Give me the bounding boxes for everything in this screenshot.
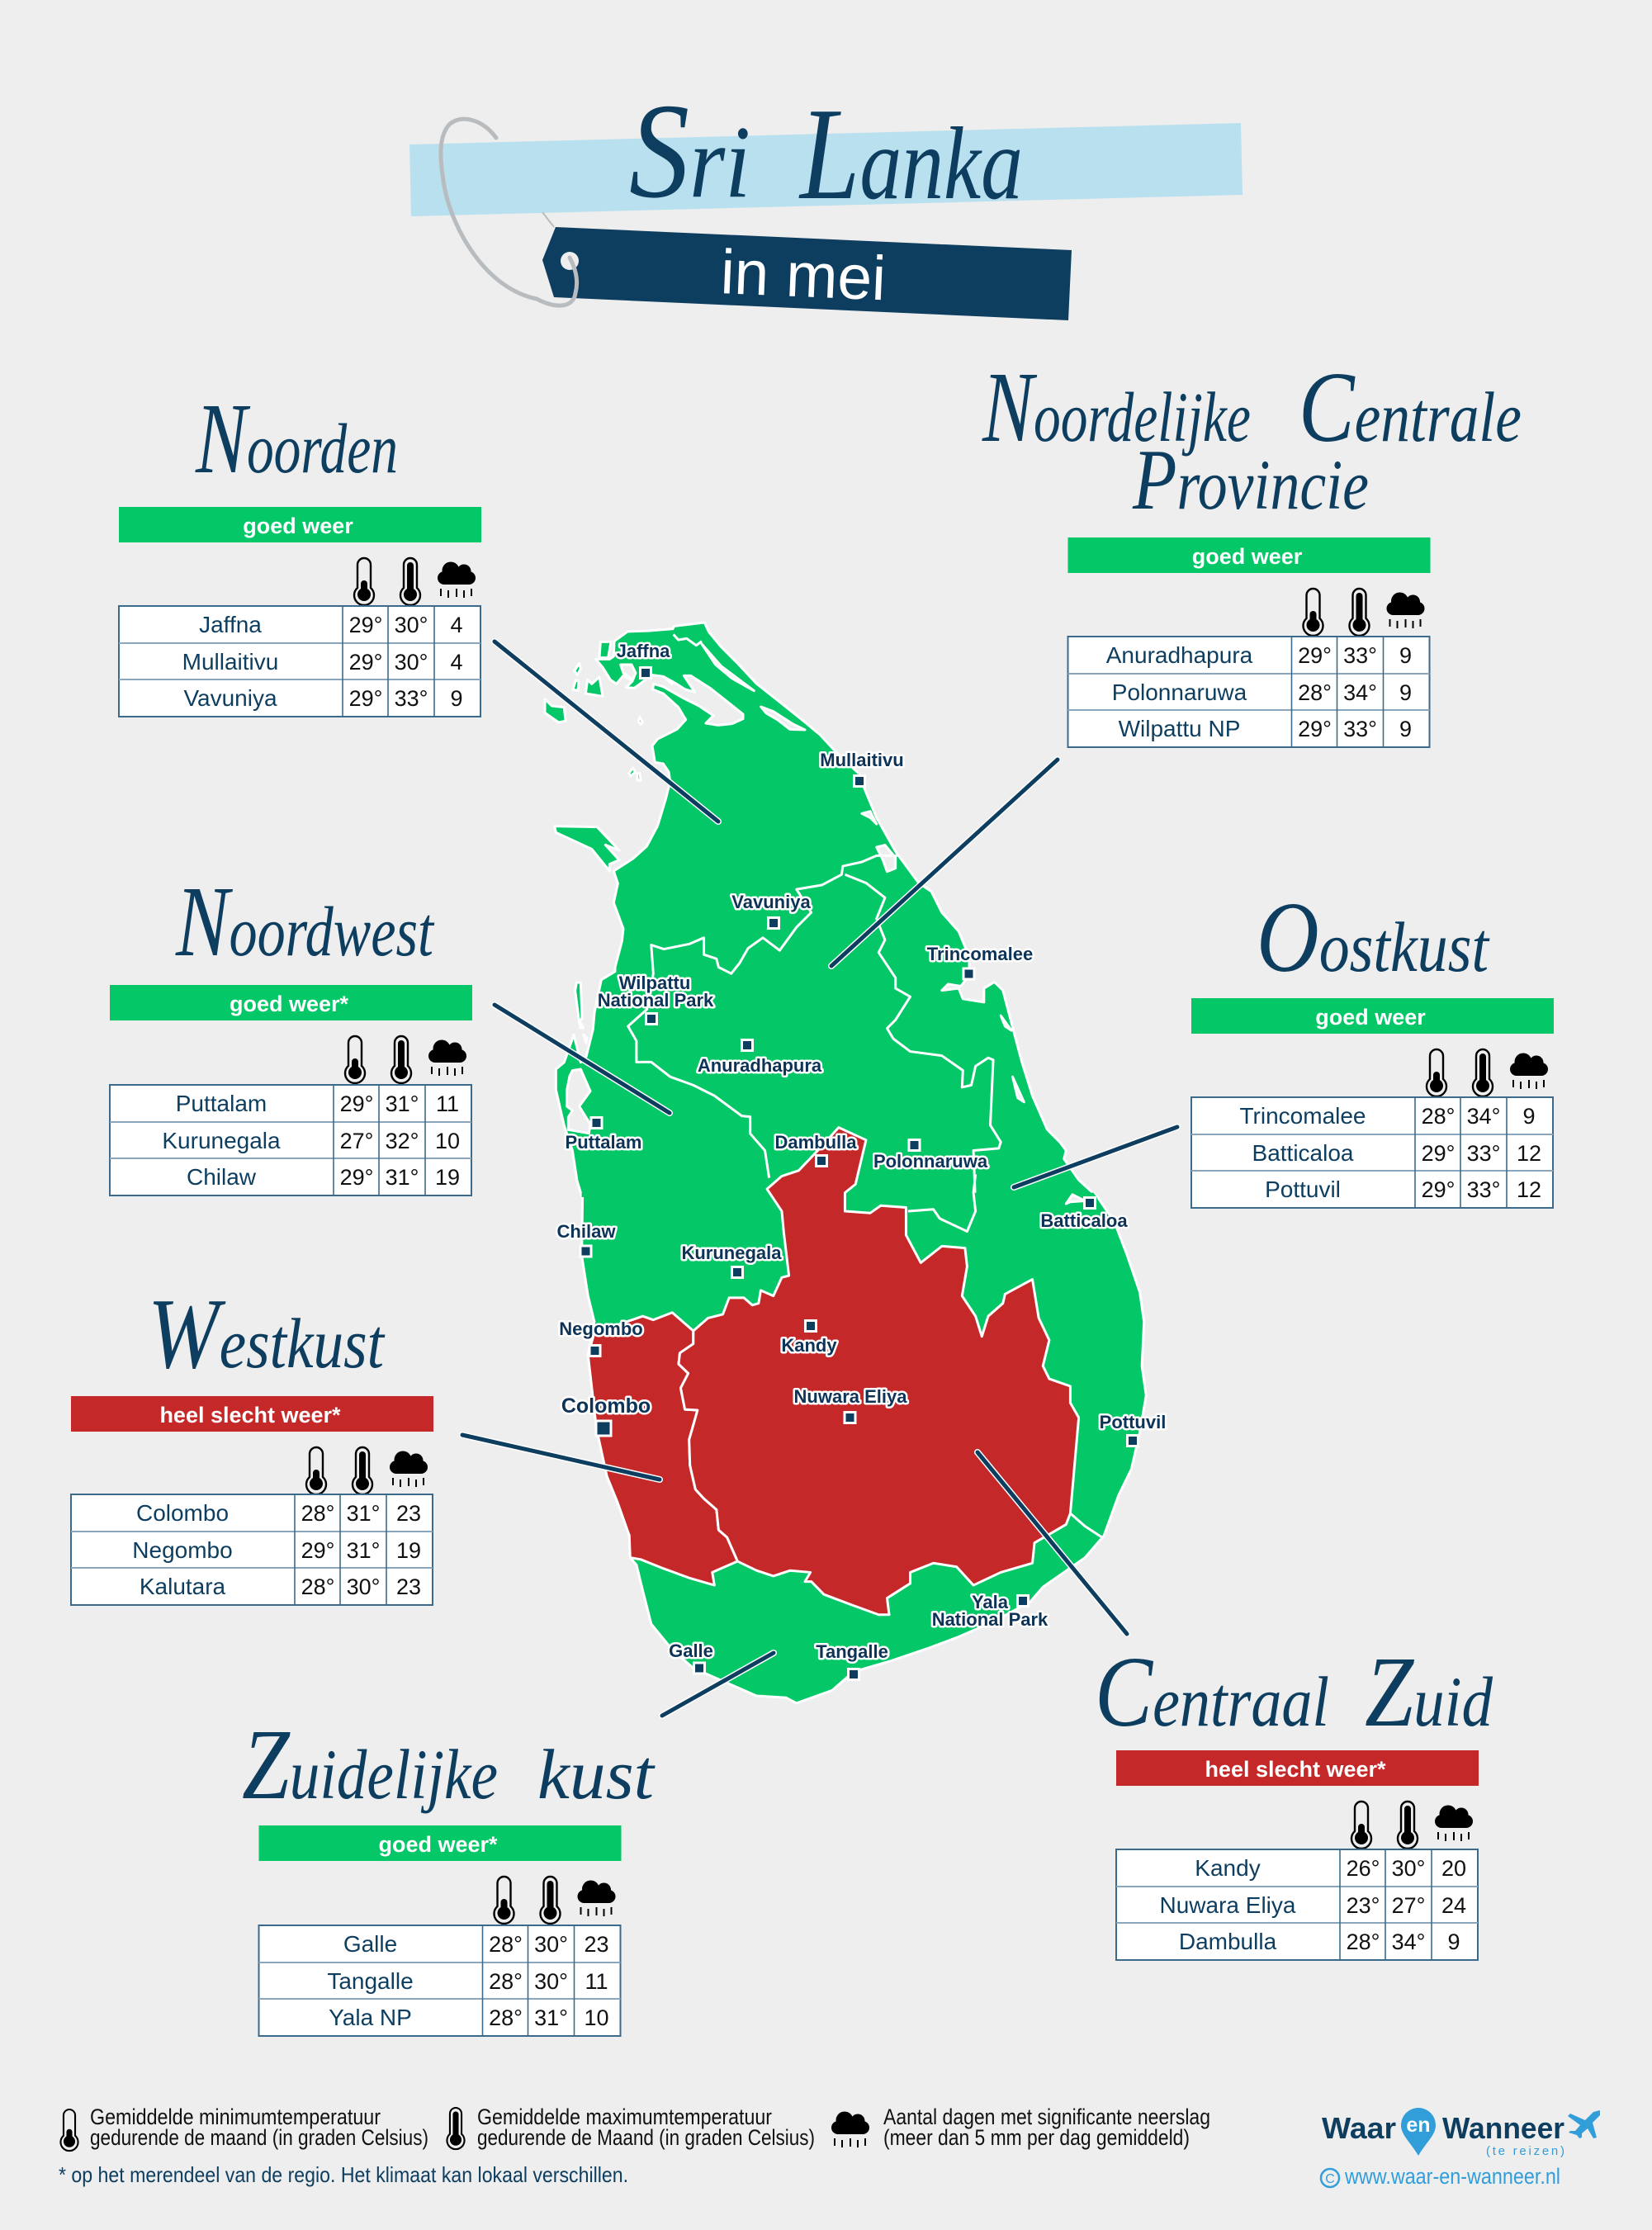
weather bar and table [71, 1396, 433, 1605]
weather bar and table: 11 [585, 1969, 608, 1994]
legend text: maximum: gedurende de Maand (in graden Celsius) [477, 2125, 815, 2150]
city labels: Nuwara Eliya [794, 1386, 907, 1407]
city labels: Wilpattu [619, 973, 690, 993]
heading [1095, 1636, 1493, 1748]
title text [629, 75, 1023, 227]
heading: Zuidelijke [242, 1709, 498, 1820]
weather bar and table: 29° [1422, 1177, 1455, 1202]
city labels: Negombo [559, 1319, 643, 1339]
weather bar and table: 9 [450, 686, 463, 711]
weather bar and table: 4 [450, 613, 463, 637]
panel: Noordwest [110, 866, 472, 1195]
weather bar and table: 28° [489, 2005, 523, 2030]
weather bar and table: Yala NP [329, 2005, 412, 2030]
title banner: Sri Lanka [409, 75, 1243, 227]
city labels: Batticaloa [1040, 1210, 1128, 1231]
city labels: Kandy [781, 1335, 837, 1356]
city labels: National Park [932, 1609, 1048, 1630]
weather bar and table: 33° [395, 686, 428, 711]
weather bar and table: 30° [347, 1574, 380, 1599]
heading: Noordwest [175, 866, 435, 978]
weather bar and table: Trincomalee [1239, 1103, 1366, 1129]
weather bar and table: 9 [1399, 643, 1412, 668]
weather bar and table [1068, 537, 1430, 747]
weather bar and table: goed weer [1315, 1005, 1426, 1030]
weather bar and table: 29° [340, 1165, 373, 1190]
weather bar and table: Kalutara [140, 1574, 226, 1599]
weather bar and table: Tangalle [327, 1968, 414, 1994]
weather bar and table: 28° [1422, 1104, 1455, 1129]
weather bar and table: 27° [1392, 1893, 1425, 1918]
west coast outline, lagoon and islands [555, 826, 658, 1197]
icon: plane [1568, 2110, 1600, 2138]
map west coast [556, 826, 716, 1197]
copyright and website: www.waar-en-wanneer.nl [1344, 2164, 1560, 2189]
city labels: Mullaitivu [820, 750, 904, 770]
weather bar and table: Kurunegala [162, 1128, 281, 1153]
heading: Provincie [1132, 431, 1369, 528]
region: Westkust [588, 1313, 737, 1585]
weather bar and table: 32° [386, 1129, 419, 1153]
logo: Waar en Wanneer: (te reizen) [1486, 2144, 1564, 2158]
weather bar and table: 28° [301, 1574, 334, 1599]
legend text: rain [883, 2105, 1210, 2150]
weather bar and table: 29° [349, 650, 382, 675]
logo: Waar en Wanneer [1321, 2108, 1600, 2189]
weather bar and table: heel slecht weer* [159, 1403, 341, 1427]
weather bar and table: 28° [301, 1501, 334, 1526]
panel: Centraal Zuid [1095, 1636, 1493, 1960]
panel: Westkust [71, 1278, 433, 1605]
subtitle: in mei [719, 237, 888, 314]
weather bar and table: 11 [436, 1091, 459, 1116]
weather bar and table: 28° [489, 1969, 523, 1994]
weather bar and table: 29° [301, 1538, 334, 1563]
heading: Zuid [1365, 1636, 1493, 1748]
weather bar and table: 33° [1467, 1141, 1500, 1166]
legend text: rain: Aantal dagen met significante neerslag [883, 2105, 1210, 2129]
weather bar and table: 30° [534, 1969, 568, 1994]
city markers [580, 667, 1138, 1679]
heading: Noordelijke [982, 352, 1251, 463]
legend text: rain: (meer dan 5 mm per dag gemiddeld) [883, 2125, 1190, 2150]
icon: minimum temperature [60, 2109, 78, 2151]
weather bar and table: 31° [347, 1501, 380, 1526]
weather bar and table: 27° [340, 1129, 373, 1153]
weather bar and table: 9 [1399, 717, 1412, 741]
weather bar and table: 10 [584, 2005, 609, 2030]
weather bar and table: 34° [1467, 1104, 1500, 1129]
weather bar and table: Wilpattu NP [1119, 716, 1240, 741]
city labels: Pottuvil [1100, 1412, 1166, 1432]
city labels: Jaffna [617, 641, 670, 661]
weather bar and table [1116, 1750, 1479, 1960]
legend text: minimum: Gemiddelde minimumtemperatuur [90, 2105, 381, 2129]
city labels: Colombo [561, 1394, 651, 1418]
weather bar and table: 20 [1441, 1856, 1466, 1881]
weather bar and table: Kandy [1195, 1855, 1261, 1881]
weather bar and table: Batticaloa [1252, 1140, 1354, 1166]
weather bar and table [110, 985, 472, 1195]
weather bar and table: Mullaitivu [182, 649, 278, 675]
weather bar and table: goed weer* [378, 1832, 498, 1857]
weather bar and table: 30° [534, 1932, 568, 1957]
heading: Westkust [148, 1278, 386, 1390]
weather bar and table: Pottuvil [1265, 1177, 1341, 1202]
weather bar and table: goed weer [1192, 544, 1303, 569]
weather bar and table: 29° [349, 686, 382, 711]
weather bar and table: 29° [1298, 643, 1332, 668]
legend [60, 2105, 1210, 2151]
weather bar and table [119, 507, 481, 717]
weather bar and table: 34° [1343, 680, 1377, 705]
city labels: Polonnaruwa [873, 1151, 988, 1172]
map north part [628, 774, 1102, 1205]
weather bar and table: Dambulla [1179, 1929, 1277, 1954]
weather bar and table: 33° [1343, 717, 1377, 741]
weather bar and table: goed weer* [230, 992, 349, 1016]
weather bar and table: Jaffna [199, 612, 262, 637]
weather bar and table: 34° [1392, 1929, 1425, 1954]
north tip coast and islands [545, 623, 859, 826]
weather bar and table: 28° [1347, 1929, 1380, 1954]
weather bar and table: 4 [450, 650, 463, 675]
icon: maximum temperature [447, 2108, 465, 2149]
legend text: minimum [90, 2105, 428, 2150]
weather bar and table: 31° [534, 2005, 568, 2030]
copyright and website: C [1325, 2172, 1335, 2186]
weather bar and table: 33° [1343, 643, 1377, 668]
weather bar and table: Chilaw [187, 1164, 257, 1190]
city labels [557, 641, 1166, 1662]
weather bar and table: Colombo [136, 1500, 229, 1526]
weather bar and table: Vavuniya [183, 685, 277, 711]
city labels: Tangalle [816, 1641, 888, 1662]
weather bar and table: 9 [1447, 1929, 1460, 1954]
logo: Waar en Wanneer: en [1406, 2114, 1431, 2137]
logo: Waar en Wanneer: Wanneer [1442, 2111, 1564, 2145]
weather bar and table: 19 [396, 1538, 421, 1563]
map south part [582, 1128, 1146, 1703]
weather bar and table: 23 [584, 1932, 609, 1957]
weather bar and table: 30° [1392, 1856, 1425, 1881]
weather bar and table: 33° [1467, 1177, 1500, 1202]
weather bar and table: Nuwara Eliya [1160, 1892, 1296, 1918]
legend text: minimum: gedurende de maand (in graden Celsius) [90, 2125, 428, 2150]
city labels: Trincomalee [927, 944, 1033, 964]
weather bar and table: 23 [396, 1574, 421, 1599]
weather bar and table: 31° [386, 1165, 419, 1190]
weather bar and table: 28° [1298, 680, 1332, 705]
weather bar and table: 26° [1347, 1856, 1380, 1881]
weather bar and table: 31° [347, 1538, 380, 1563]
weather bar and table: 31° [386, 1091, 419, 1116]
weather bar and table: 10 [435, 1129, 460, 1153]
weather bar and table: 29° [1422, 1141, 1455, 1166]
heading: Oostkust [1257, 882, 1490, 993]
weather bar and table: 19 [435, 1165, 460, 1190]
heading: Centrale [1299, 352, 1522, 463]
weather bar and table: 30° [395, 613, 428, 637]
weather bar and table: Galle [343, 1931, 397, 1957]
region: Centraal Zuid [679, 1128, 1079, 1615]
panel: Oostkust [1191, 882, 1554, 1208]
weather bar and table [259, 1825, 621, 2036]
legend text: maximum: Gemiddelde maximumtemperatuur [477, 2105, 772, 2129]
city labels: Dambulla [774, 1132, 857, 1153]
weather bar and table: Negombo [132, 1537, 233, 1563]
weather bar and table: 9 [1522, 1104, 1536, 1129]
weather bar and table: 29° [349, 613, 382, 637]
city labels: Anuradhapura [698, 1055, 822, 1076]
title text: Sri [629, 75, 750, 226]
weather bar and table: 23 [396, 1501, 421, 1526]
weather bar and table: Anuradhapura [1106, 642, 1253, 668]
heading [982, 352, 1522, 528]
logo: Waar en Wanneer: Waar [1322, 2111, 1396, 2145]
weather bar and table: 9 [1399, 680, 1412, 705]
weather bar and table: 28° [489, 1932, 523, 1957]
weather bar and table: 24 [1441, 1893, 1466, 1918]
weather bar and table [1191, 998, 1554, 1208]
panel: Noordelijke Centrale Provincie [982, 352, 1522, 747]
pointer lines [462, 642, 1177, 1716]
weather bar and table: 23° [1347, 1893, 1380, 1918]
panel: Noorden [119, 383, 481, 717]
weather bar and table: Polonnaruwa [1112, 679, 1247, 705]
weather bar and table: goed weer [243, 514, 353, 538]
weather bar and table: Puttalam [176, 1091, 267, 1116]
city labels: Vavuniya [731, 892, 811, 912]
luggage tag: in mei [441, 119, 1072, 320]
weather bar and table: heel slecht weer* [1205, 1757, 1386, 1782]
map north tip [596, 623, 859, 859]
city labels: Kurunegala [681, 1243, 782, 1263]
legend text: maximum [477, 2105, 815, 2150]
city labels: Galle [669, 1641, 713, 1661]
weather bar and table: 12 [1517, 1177, 1541, 1202]
map of Sri Lanka [462, 623, 1177, 1716]
city labels: Chilaw [557, 1221, 616, 1242]
heading: kust [537, 1735, 656, 1814]
city labels: Yala [972, 1592, 1009, 1612]
city labels: National Park [598, 990, 714, 1011]
heading: Noorden [195, 383, 398, 495]
weather bar and table: 29° [340, 1091, 373, 1116]
heading: Centraal [1095, 1636, 1329, 1748]
weather bar and table: 30° [395, 650, 428, 675]
city labels: Puttalam [566, 1132, 641, 1153]
panel: Zuidelijke kust [242, 1709, 656, 2036]
weather bar and table: 12 [1517, 1141, 1541, 1166]
weather bar and table: 29° [1298, 717, 1332, 741]
title text: Lanka [798, 80, 1023, 227]
footnote: * op het merendeel van de regio. Het klimaat kan lokaal verschillen. [59, 2162, 628, 2187]
icon: rain cloud [831, 2112, 869, 2147]
